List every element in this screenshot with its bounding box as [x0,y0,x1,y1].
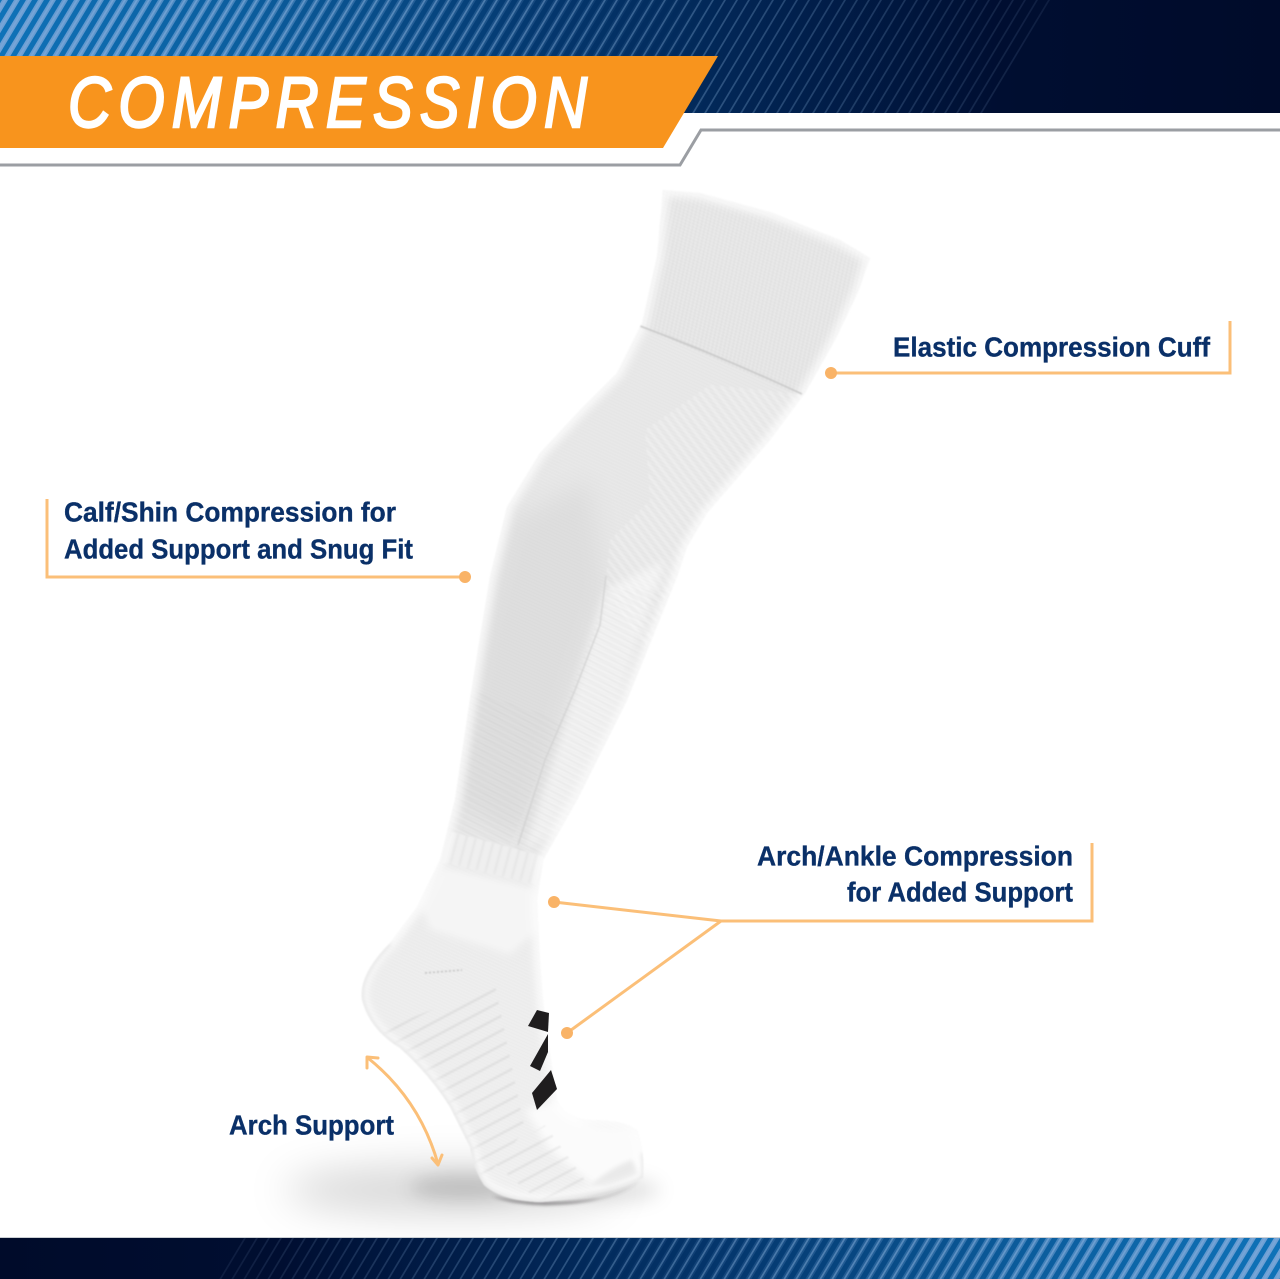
calf darker panel [476,504,590,809]
cuff ribbing [635,185,880,400]
edge highlight [362,190,870,1202]
knit texture [340,180,880,1210]
callout: elastic compression cuff [825,321,1230,379]
callout: calf and shin compression [47,496,471,583]
toe sole texture [497,1136,584,1193]
icon: black logo chevrons [528,1010,557,1110]
title: COMPRESSION [68,63,588,142]
callout: arch and ankle compression: Arch/Ankle Compression [757,840,1073,872]
callout: elastic compression cuff: Elastic Compression Cuff [893,332,1211,362]
foot outline shading [362,943,644,1202]
ankle rib band [456,834,536,866]
shin lighter panel [532,568,658,840]
callout: arch and ankle compression: for Added Support [847,876,1073,908]
toe seam [594,1161,636,1186]
floor shadow [285,1166,660,1214]
shin chevron texture [510,590,680,870]
lower leg texture [445,690,560,845]
arrow: arch curve [367,1057,442,1165]
header grey keyline [0,130,1280,165]
footer band with diagonal stripes [0,1237,1280,1279]
sock [340,180,880,1210]
toe white panel [530,1104,636,1180]
title banner [0,56,718,148]
header band with diagonal stripes [0,0,1280,113]
callout: arch support: Arch Support [229,1110,394,1140]
callout: calf and shin compression: Calf/Shin Compression for [64,496,396,528]
callout: arch and ankle compression [548,840,1092,1039]
heel stitching [425,970,462,973]
knee chevron texture [605,385,810,660]
sock base fill [340,180,880,1210]
heel and ankle panel [426,870,530,950]
arch rib texture [390,989,523,1172]
cuff fold seam [640,326,802,394]
callout: calf and shin compression: Added Support and Snug Fit [64,534,413,564]
callout: arch support [229,1057,442,1165]
calf seam [518,576,606,845]
